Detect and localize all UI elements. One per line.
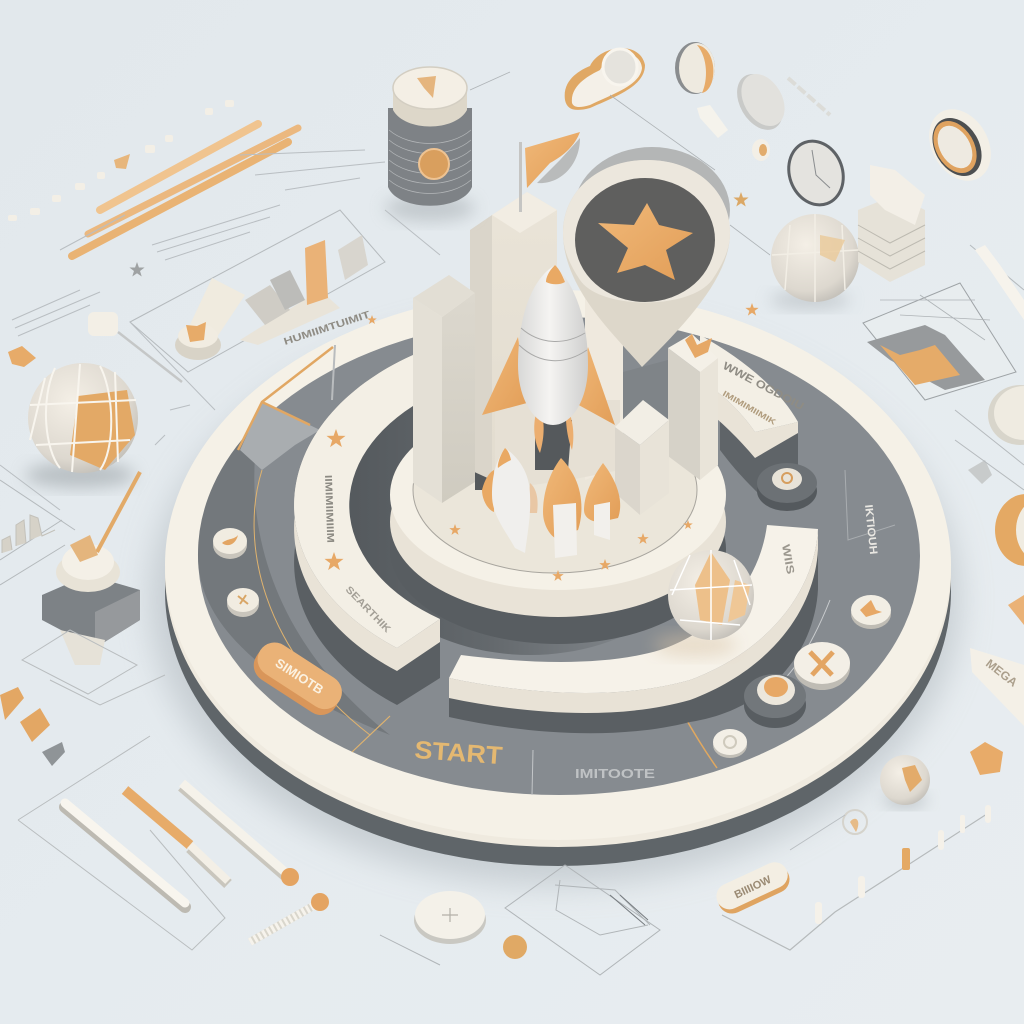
silver coin (728, 66, 793, 138)
chart star stack (175, 322, 221, 360)
start label: START (414, 736, 503, 770)
bottom segment label: WIIS (779, 543, 796, 575)
short tower (615, 400, 669, 515)
bottom middle arc segment (449, 525, 818, 733)
ring tokens (213, 463, 891, 758)
right cream coin (988, 385, 1024, 445)
left small orange pieces (0, 687, 65, 766)
right arrow tag: MEGA (983, 656, 1020, 690)
right arc sublabel: IMIMIMIIMIK (721, 389, 778, 427)
lower left pencil panel (18, 736, 329, 950)
segment side cream (449, 529, 818, 713)
jar lid star (417, 76, 436, 98)
jar badge (419, 149, 449, 179)
platform stars (324, 303, 759, 581)
cream columns under rocket (495, 400, 620, 490)
token x (794, 642, 850, 690)
clock coin (778, 131, 854, 215)
white small rocket (482, 448, 538, 553)
floor divider lines (254, 470, 895, 795)
lower left arc label: SEARTHIK (343, 584, 393, 636)
orange small rocket (543, 458, 581, 558)
bottom right pill: BIIIIOW (733, 874, 774, 901)
main circular roadmap platform (150, 290, 960, 885)
right back block (585, 290, 623, 480)
right globe (770, 214, 859, 309)
jar (385, 67, 475, 222)
step label: IMITOOTE (575, 766, 655, 781)
right line chart (863, 283, 1016, 400)
left edge charts (0, 480, 165, 705)
dark engine gap (535, 420, 572, 470)
map pin with star (563, 147, 730, 367)
left tower (413, 275, 475, 503)
small grey star (129, 262, 145, 276)
right arrow tag (970, 648, 1024, 726)
main rocket (482, 265, 615, 470)
annotation lines (0, 210, 845, 850)
upper ring label: HUMIIMTUIMIT (283, 310, 372, 348)
segment side dark (449, 529, 818, 733)
top left orange sticks (8, 100, 298, 256)
segment top surface (449, 525, 818, 693)
small pieces row (8, 100, 234, 221)
segment side cream (294, 355, 440, 671)
bottom button (414, 891, 486, 944)
left arc label: IIMIMIIMIIIM (322, 475, 335, 543)
left middle arc segment (294, 355, 440, 705)
segment top surface (294, 355, 440, 648)
upper left chart (129, 210, 385, 372)
right orange star (970, 742, 1003, 775)
token dark orange (744, 674, 806, 728)
right stacked tower (858, 165, 925, 282)
orange ring disc (917, 98, 1003, 192)
cloud icon (565, 48, 645, 110)
bottom right timeline (722, 805, 991, 950)
left plinth with brush (42, 472, 140, 665)
white pencil (182, 783, 299, 886)
orange pill button (247, 636, 348, 722)
upper left small block and pointer (8, 312, 182, 382)
bottom right pill (712, 858, 794, 918)
tall back tower (470, 192, 557, 480)
segment side dark (294, 355, 440, 705)
small ball right (880, 755, 930, 807)
star icon (598, 203, 693, 280)
right floor label: IKTIOUH (862, 504, 879, 555)
small floating pieces (470, 72, 830, 255)
token cream right (851, 595, 891, 629)
upper right arc segment (700, 335, 798, 495)
rocket body (518, 265, 588, 425)
bottom chart panel (380, 865, 660, 975)
disc globe (653, 550, 754, 657)
orange pill button: SIMIOTB (273, 655, 326, 697)
half disc (675, 42, 715, 94)
ring labels (283, 310, 879, 781)
central platform (390, 400, 726, 644)
small rockets (482, 448, 620, 558)
right small items (955, 245, 1024, 625)
pale sail shape on floor (240, 402, 320, 470)
bar chart towers (413, 192, 718, 515)
text blocks upper left (12, 150, 385, 336)
left globe (25, 363, 138, 488)
right orange coin (995, 494, 1024, 566)
token left lower (227, 588, 259, 617)
screw (250, 893, 329, 942)
token small bottom (713, 729, 747, 758)
white ruler (65, 803, 185, 907)
rocket fins (482, 337, 527, 415)
flag (519, 132, 580, 212)
right tower (668, 334, 718, 480)
small bottom orange ornament (503, 935, 527, 959)
dark gaps behind towers (475, 360, 500, 490)
orange pencil (125, 790, 228, 884)
grey floor (198, 317, 920, 795)
token left upper (213, 528, 247, 559)
outer ring (165, 290, 951, 866)
dark well (345, 375, 715, 655)
token dark upper right (757, 463, 817, 511)
orange small rocket right (584, 463, 620, 540)
right arc label: WWE OGDOIU (721, 360, 806, 413)
orange frame on ring (238, 345, 335, 450)
